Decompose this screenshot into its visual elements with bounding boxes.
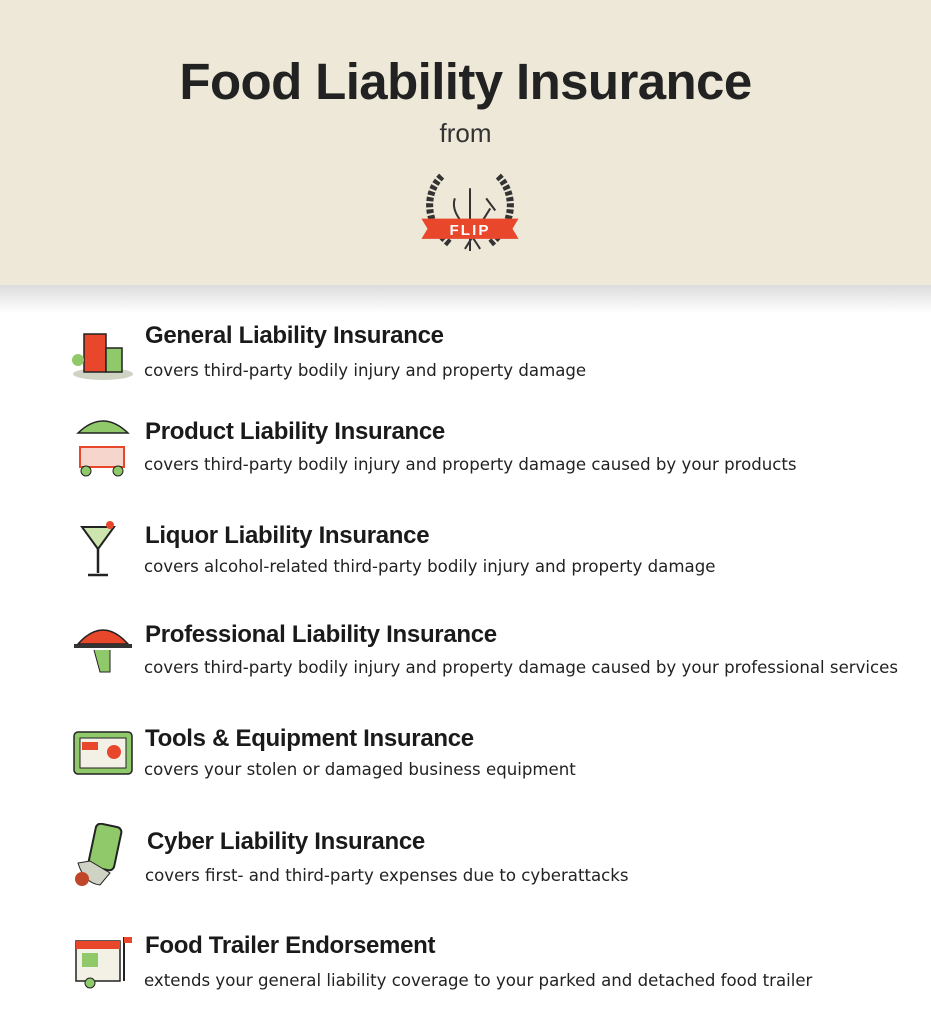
heading: Liquor Liability Insurance bbox=[145, 522, 429, 549]
item: professional liability bbox=[74, 621, 898, 677]
description: covers your stolen or damaged business equipment bbox=[144, 760, 576, 779]
logo: FLIP bbox=[422, 174, 518, 251]
description: covers alcohol-related third-party bodily injury and property damage bbox=[144, 557, 715, 576]
item: cyber liability bbox=[75, 823, 629, 886]
description: covers first- and third-party expenses due to cyberattacks bbox=[145, 866, 629, 885]
heading: Tools & Equipment Insurance bbox=[145, 725, 474, 752]
heading: Product Liability Insurance bbox=[145, 418, 445, 445]
icon: food trailer bbox=[75, 937, 132, 988]
item: tools & equipment bbox=[73, 725, 576, 779]
icon: phone in hand bbox=[75, 823, 122, 886]
item: liquor liability bbox=[80, 521, 715, 576]
title: Food Liability Insurance bbox=[179, 53, 752, 110]
description: covers third-party bodily injury and property damage caused by your professional services bbox=[144, 658, 898, 677]
description: covers third-party bodily injury and property damage bbox=[144, 361, 586, 380]
icon: cloche bbox=[74, 629, 132, 672]
header band bbox=[0, 0, 931, 285]
heading: General Liability Insurance bbox=[145, 322, 444, 349]
item: product liability bbox=[76, 418, 797, 476]
icon: buildings bbox=[72, 333, 133, 380]
subtitle from: from bbox=[440, 118, 492, 148]
description: extends your general liability coverage to your parked and detached food trailer bbox=[144, 971, 812, 990]
item: general liability bbox=[72, 322, 586, 380]
heading: Cyber Liability Insurance bbox=[147, 828, 425, 855]
icon: equipment box bbox=[73, 731, 133, 775]
heading: Food Trailer Endorsement bbox=[145, 932, 435, 959]
icon: food cart bbox=[76, 420, 130, 476]
icon: cocktail bbox=[80, 521, 116, 576]
description: covers third-party bodily injury and property damage caused by your products bbox=[144, 455, 797, 474]
heading: Professional Liability Insurance bbox=[145, 621, 497, 648]
item: food trailer bbox=[75, 932, 812, 990]
logo: FLIP: FLIP bbox=[450, 222, 490, 239]
